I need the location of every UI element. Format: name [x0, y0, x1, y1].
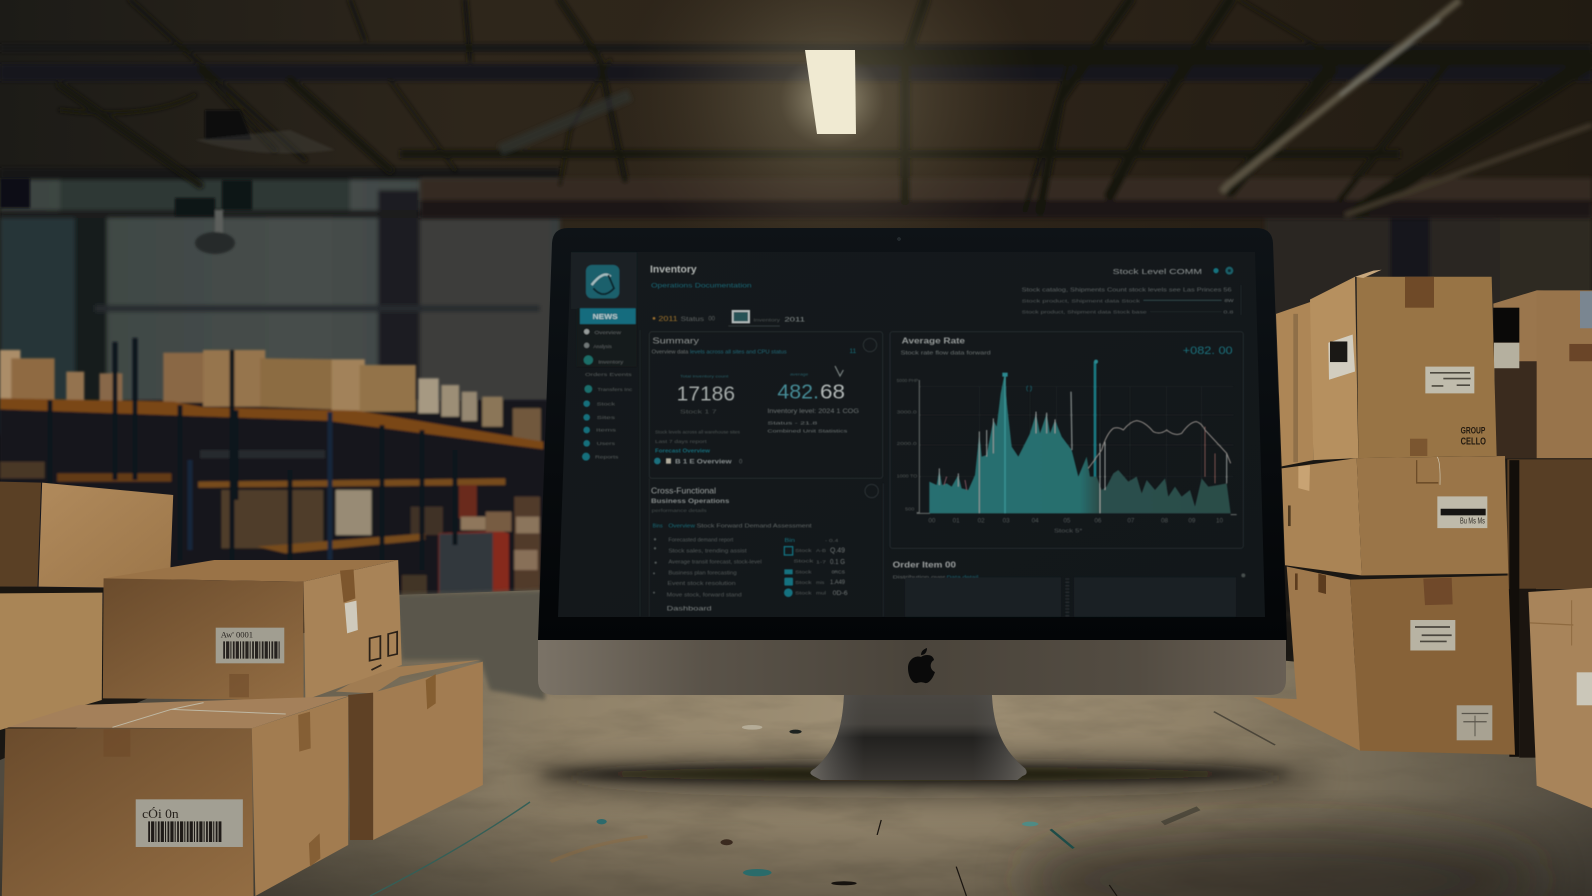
roof trusses [0, 0, 1592, 218]
metric: value: 68 [820, 381, 845, 403]
teal header row [653, 524, 812, 530]
box: top: GROUP [1461, 426, 1486, 436]
summary subheading: levels across all sites and CPU status [690, 350, 787, 356]
metric: value: Status - 21.8 [767, 420, 818, 426]
heading: cross-functional: Cross-Functional [651, 485, 716, 495]
nav items: Overview [594, 330, 622, 336]
chart grid [920, 387, 1233, 513]
status row [653, 310, 805, 326]
right list: Stock [795, 569, 812, 575]
metric: value [767, 366, 859, 435]
overlay line [1088, 421, 1231, 468]
area chart: 02 [978, 518, 985, 525]
right list: 1-7 [816, 559, 826, 565]
summary notes: Stock levels across all warehouse sites [655, 430, 741, 435]
nav items: Users [597, 441, 616, 447]
dashboard: left column [571, 252, 883, 617]
nav items [582, 329, 633, 461]
right list: Bin [784, 538, 795, 544]
header summary: Stock Level COMM [1113, 267, 1202, 276]
right list: mis [816, 580, 825, 586]
second shelf [0, 450, 540, 612]
warehouse background [0, 0, 1592, 442]
right list: 0.1 G [830, 557, 845, 566]
right box stack [1253, 270, 1592, 808]
top row boxes [0, 350, 543, 449]
floor stains [250, 590, 1592, 896]
sidebar logo [586, 265, 619, 298]
heading: orders: Order Item 00 [893, 561, 957, 570]
status row: Inventory [753, 318, 781, 324]
metric: value: 482. [777, 381, 819, 403]
header summary [1022, 267, 1241, 315]
pallet jack [425, 531, 509, 612]
left box stack [0, 482, 483, 896]
panel: chart [890, 332, 1243, 548]
back right boxes [1493, 290, 1592, 758]
upright posts [50, 338, 455, 600]
metric: total count: Total inventory count [680, 373, 730, 378]
teal header row: Overview [668, 524, 696, 530]
header summary: Stock product, Shipment data Stock [1022, 298, 1141, 304]
monitor stand [810, 695, 1027, 780]
right list: Stock [795, 591, 812, 597]
box: top left [0, 482, 173, 588]
teal floor streak [370, 802, 530, 896]
right list: 0RCS [832, 569, 846, 575]
bezel [538, 228, 1287, 640]
box: top: CELLO [1461, 436, 1486, 447]
metric: total count: 17186 [677, 384, 735, 406]
active nav item: NEWS [593, 312, 618, 321]
left list: Business plan forecasting [668, 570, 737, 576]
floor vignette [0, 640, 1592, 896]
axis labels: 5000 PHP [897, 378, 919, 384]
monitor cast shadow [525, 758, 1325, 798]
monitor chin [538, 638, 1286, 695]
teal header row: Stock Forward Demand Assessment [697, 524, 812, 530]
area chart: 08 [1161, 518, 1169, 525]
shadow between boxes [0, 587, 104, 593]
nav items: Transfers Inc [597, 387, 633, 393]
left list [653, 537, 762, 612]
dashboard: right column [890, 267, 1245, 617]
peak lines [939, 360, 1227, 513]
shelf interior [0, 400, 548, 605]
right list: 1.A49 [830, 579, 845, 586]
area chart: ( ) [1026, 385, 1032, 392]
sidebar [571, 252, 640, 617]
right list: Stock [795, 580, 812, 586]
area chart: 03 [1003, 518, 1010, 525]
panel: orders: Distribution over [893, 574, 946, 580]
box: middle with barcode [103, 560, 402, 700]
handling marks [370, 632, 397, 670]
status row: 2011 [658, 314, 678, 323]
area chart: 10 [1216, 518, 1224, 525]
box: middle left [0, 592, 102, 730]
logo on chin [908, 648, 935, 683]
metric: value: Inventory level: 2024 1 COG [767, 409, 859, 415]
header summary: Stock product, Shipment data Stock base [1022, 309, 1147, 315]
page subtitle: Operations Documentation [651, 283, 752, 290]
wall: right dark [1265, 195, 1592, 395]
left list: Event stock resolution [667, 581, 736, 587]
panel: cross-functional: performance details [652, 508, 707, 514]
metric: value: Combined Unit Statistics [767, 429, 848, 435]
status row: 00 [708, 316, 716, 322]
nav items: Orders Events [585, 372, 632, 378]
area chart: Stock 5* [1054, 528, 1082, 534]
box: middle: Bu Ms Ms [1460, 516, 1485, 526]
header summary: Stock catalog, Shipments Count stock levels see Las Princes 56 [1022, 287, 1232, 293]
area chart: 04 [1032, 518, 1039, 525]
area chart: 01 [953, 518, 960, 525]
active nav item [580, 308, 636, 324]
floor specks [551, 712, 1275, 896]
barcode label: Aw' 0001 [221, 631, 253, 639]
box: front right [1528, 588, 1592, 808]
ceiling light [622, 0, 1042, 290]
monitor [538, 228, 1287, 780]
status row: 2011 [784, 316, 805, 323]
axis labels [897, 378, 919, 513]
axis labels: 2000.0 [897, 441, 917, 447]
ceiling fixtures [0, 110, 335, 254]
summary notes [654, 430, 743, 465]
area chart [897, 360, 1237, 534]
left list: Average transit forecast, stock-level [668, 560, 762, 566]
upper floor grey patch [395, 590, 545, 700]
metric: total count [677, 373, 735, 415]
box: bottom [1253, 566, 1515, 755]
warehouse shelving [0, 338, 548, 612]
panel: cross-functional [649, 478, 883, 617]
axis labels: 3000.0 [897, 409, 917, 415]
header summary: 0.8 [1223, 309, 1234, 315]
heading: chart: Average Rate [902, 337, 966, 346]
right list [784, 538, 848, 597]
panel: summary [649, 332, 883, 478]
nav items: Stock [597, 402, 616, 408]
summary notes: Last 7 days report [655, 439, 707, 445]
area chart: 06 [1094, 518, 1102, 525]
metric: total count: Stock 1 7 [680, 409, 717, 415]
box: top [1276, 270, 1497, 466]
panel: orders [893, 561, 1245, 617]
barcode label [136, 799, 243, 847]
ceiling [0, 0, 1592, 240]
nav items: Sites [597, 415, 616, 421]
metric: value: average [790, 371, 809, 376]
axis labels: 500 [905, 507, 915, 513]
right list: Stock [795, 548, 812, 554]
page title: Inventory [650, 265, 697, 276]
area chart: 00 [928, 518, 936, 525]
box: right lower [336, 660, 483, 840]
area series [929, 377, 1231, 513]
summary notes: Forecast Overview [655, 448, 711, 454]
summary subheading [652, 350, 787, 356]
top shelf beam [0, 398, 543, 449]
summary notes: 0 [739, 459, 743, 465]
axes [917, 380, 1237, 515]
header summary: 8W [1224, 298, 1234, 304]
left list: Move stock, forward stand [667, 592, 742, 598]
right list: 0D-6 [833, 590, 848, 597]
panel: chart: Stock rate flow data forward [901, 350, 991, 356]
nav items: Analysis [593, 344, 612, 350]
right list: Q.49 [830, 546, 845, 555]
summary subheading: Overview data [652, 350, 689, 356]
nav items: Items [596, 428, 617, 434]
left list: Forecasted demand report [668, 537, 734, 543]
barcode label: cÓi 0n [142, 806, 179, 821]
area chart: 07 [1127, 518, 1135, 525]
status row: Status [681, 317, 704, 323]
box: bottom front with barcode [2, 696, 348, 896]
nav items: Reports [595, 454, 619, 460]
panel: summary: 11 [849, 348, 857, 355]
right list: mul [816, 591, 826, 597]
wall: left concrete [0, 168, 560, 442]
nav items: Inventory [598, 359, 624, 365]
panel: cross-functional: Business Operations [651, 498, 730, 505]
screen [558, 252, 1265, 617]
teal header row: Bins [653, 524, 663, 530]
concrete floor [0, 590, 1592, 896]
heading: summary: Summary [652, 337, 699, 346]
box: middle [1282, 456, 1508, 576]
chart value: +082. 00 [1183, 345, 1233, 357]
area chart: 05 [1063, 518, 1071, 525]
floor base [0, 590, 1592, 896]
summary notes: B 1 E Overview [675, 459, 732, 465]
right list: A-B [816, 548, 827, 554]
right list: - 0.4 [825, 538, 839, 544]
panel: orders: Data detail [947, 574, 978, 580]
right list: Stock [793, 559, 814, 565]
dark floor patch right [1020, 830, 1540, 896]
left list: Stock sales, trending assist [668, 548, 747, 554]
barcode label [216, 628, 284, 663]
axis labels: 1000 TO [897, 473, 917, 479]
webcam dot [898, 238, 900, 240]
area chart: 09 [1188, 518, 1196, 525]
left list: Dashboard [667, 606, 712, 612]
